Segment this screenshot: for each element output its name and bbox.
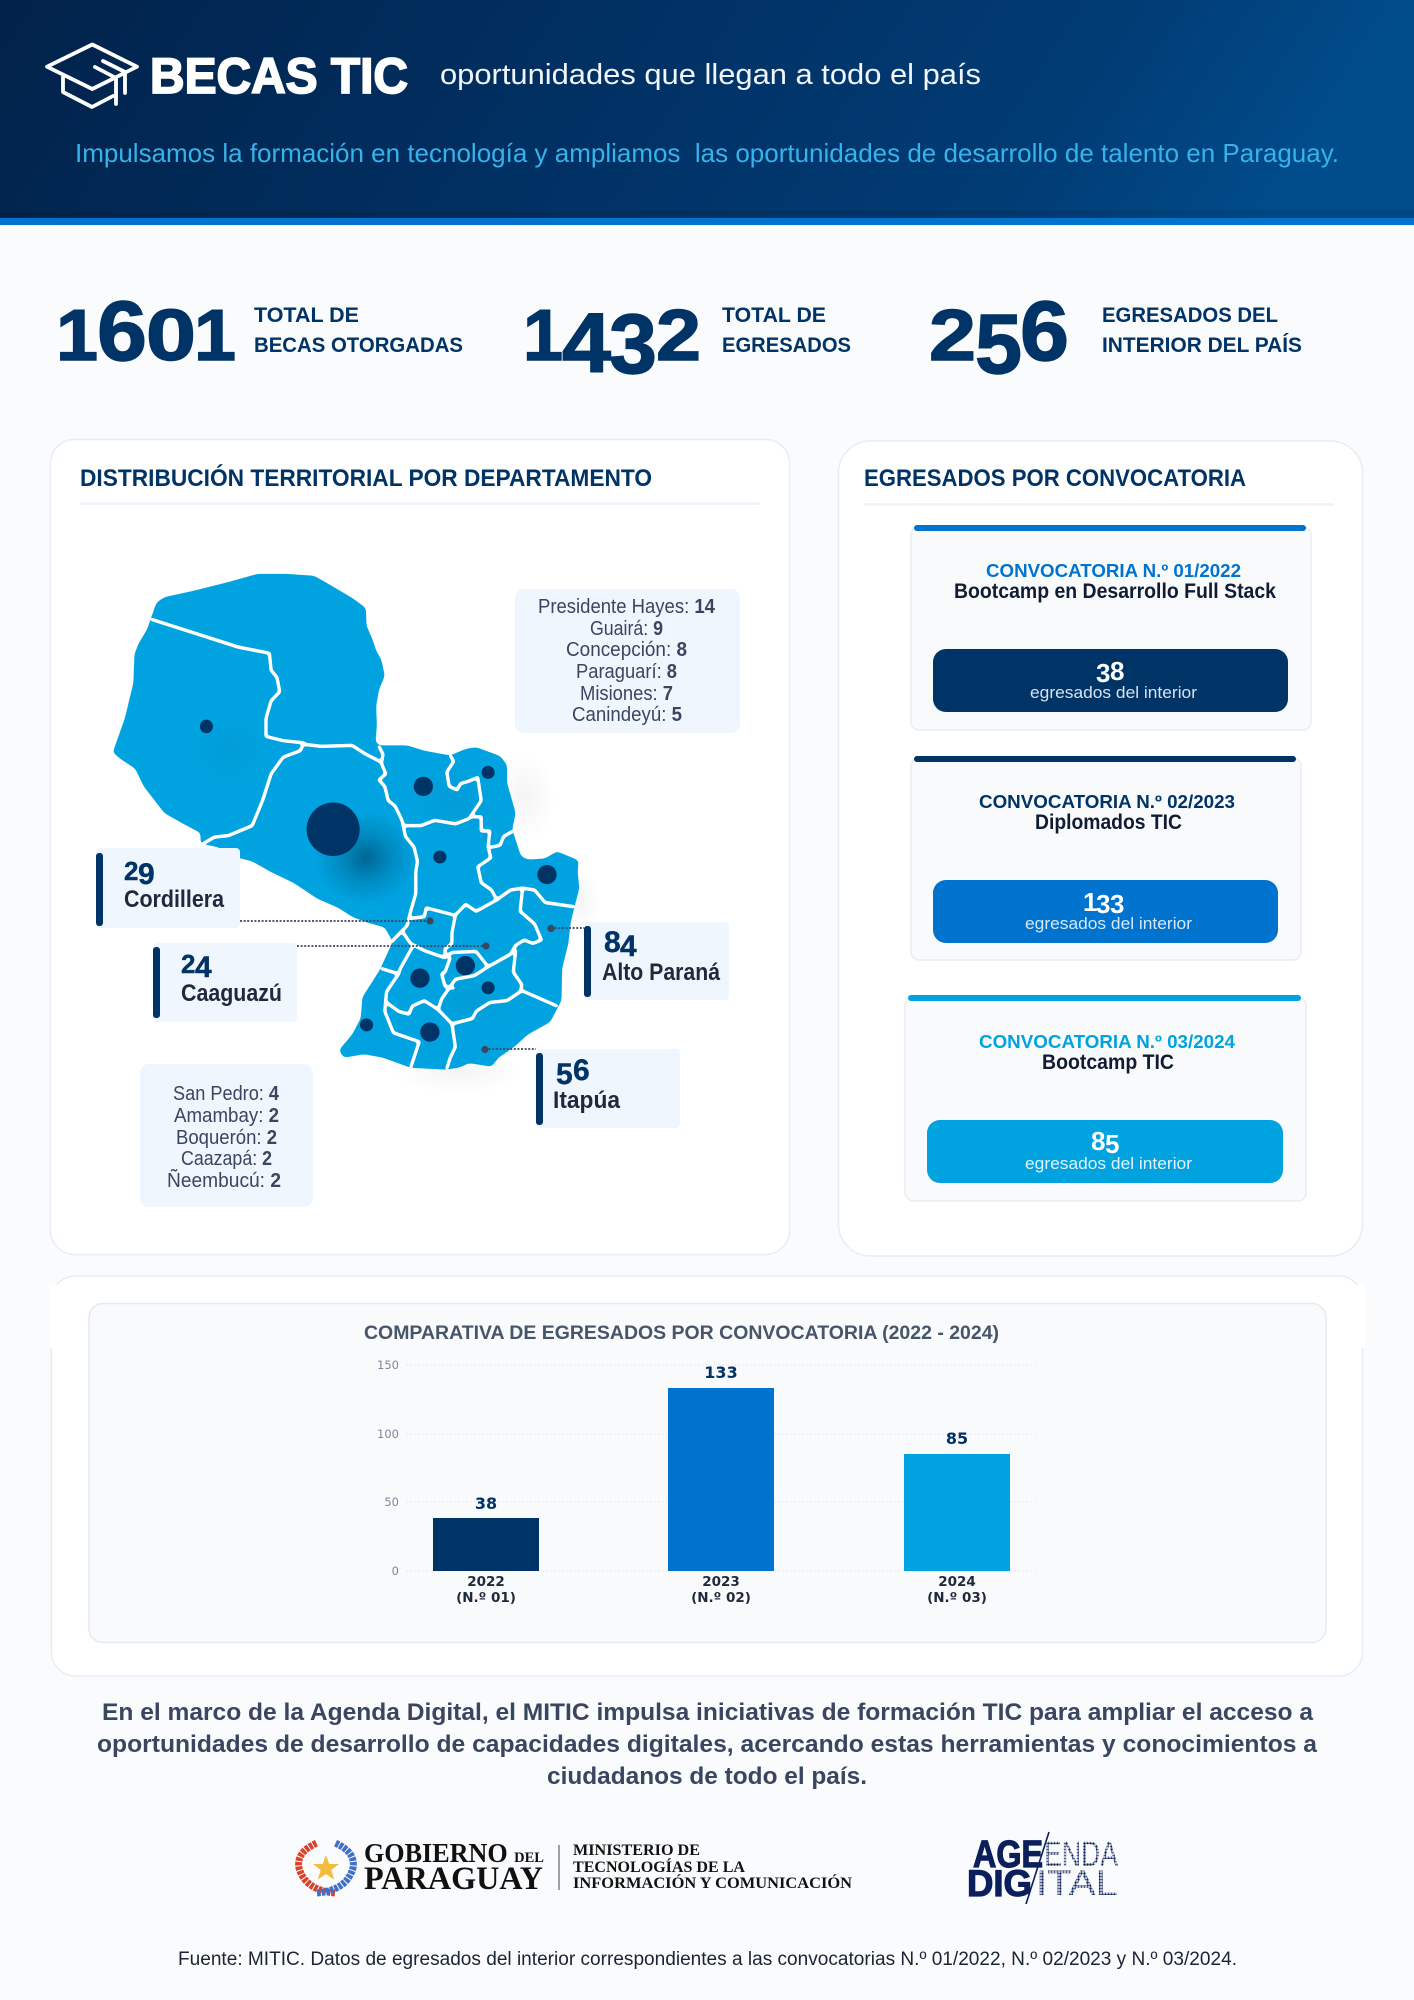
stat: 1432 egresados: 4 (562, 296, 611, 390)
logo: Gobierno del Paraguay: GOBIERNO DEL (364, 1838, 544, 1868)
list box: departamentos superiores: Presidente Hayes: 14 (538, 596, 716, 618)
department bubbles (200, 720, 557, 1042)
icon: graduation cap logo (47, 44, 137, 107)
callout: Itapúa (536, 1049, 680, 1128)
stat: 256 egresados del interior (929, 284, 1302, 391)
logo: Agenda Digital: ITAL (1036, 1864, 1118, 1903)
stat: 1432 egresados: 2 (656, 296, 701, 376)
list box: departamentos inferiores (140, 1064, 313, 1207)
list box: departamentos superiores: Paraguarí: 8 (576, 661, 677, 683)
logo: Agenda Digital: AGE (973, 1834, 1043, 1876)
closing paragraph: ciudadanos de todo el país. (547, 1763, 867, 1790)
callout: Caaguazú: 4 (195, 951, 212, 984)
value badge: egresados del interior (1030, 683, 1197, 702)
card: convocatoria 03/2024: CONVOCATORIA N.º 03/2024 (979, 1032, 1235, 1052)
leader lines (240, 917, 584, 1053)
stat: 1601 becas otorgadas: 0 (146, 296, 196, 376)
bar 2023: 133 (704, 1363, 738, 1382)
card: convocatoria 01/2022: Bootcamp en Desarrollo Full Stack (954, 580, 1276, 603)
department borders (151, 619, 574, 1069)
callout: Cordillera: 9 (138, 858, 155, 891)
list box: departamentos inferiores: Boquerón: 2 (176, 1127, 277, 1149)
callout: Cordillera: 2 (124, 856, 138, 886)
header banner (0, 0, 1414, 225)
stat: 1601 becas otorgadas: 1 (194, 296, 236, 376)
logo: Gobierno del Paraguay: MINISTERIO DE (573, 1842, 700, 1859)
callout: Caaguazú: Caaguazú (181, 980, 282, 1007)
stat label (254, 304, 463, 357)
y-axis ticks: 50 (384, 1495, 399, 1509)
bar 2024: 2024 (938, 1574, 976, 1590)
bar 2023 (668, 1363, 774, 1606)
bar 2022 (433, 1494, 539, 1606)
stat label: BECAS OTORGADAS (254, 334, 463, 357)
icon: national shield (299, 1843, 353, 1893)
y-axis ticks: 150 (377, 1358, 399, 1372)
card: convocatoria 02/2023 (911, 756, 1301, 960)
map of Paraguay (113, 574, 600, 1094)
chart title: COMPARATIVA DE EGRESADOS POR CONVOCATORIA (2022 - 2024) (364, 1323, 999, 1344)
closing paragraph (97, 1699, 1318, 1790)
bar 2024: (N.º 03) (927, 1590, 987, 1606)
logo: Gobierno del Paraguay (299, 1838, 852, 1897)
callout: Itapúa: 5 (556, 1058, 573, 1091)
value badge: 3 (1096, 658, 1110, 688)
stat: 256 egresados del interior: 5 (975, 297, 1022, 391)
subtitle: Impulsamos la formación en tecnología y ampliamos las oportunidades de desarrollo de talento en Paraguay. (75, 138, 1339, 168)
y-axis ticks: 100 (377, 1427, 399, 1441)
stat label: EGRESADOS (722, 334, 851, 357)
value badge (933, 649, 1288, 712)
y-axis ticks: 0 (392, 1564, 399, 1578)
tagline: oportunidades que llegan a todo el país (440, 59, 981, 91)
callout: Itapúa: 6 (573, 1054, 590, 1087)
closing paragraph: En el marco de la Agenda Digital, el MITIC impulsa iniciativas de formación TIC para ampliar el acceso a (102, 1699, 1314, 1726)
logo: Gobierno del Paraguay: PARAGUAY (364, 1861, 543, 1897)
list box: departamentos inferiores: Caazapá: 2 (181, 1148, 272, 1170)
panel: comparativa (50, 1276, 1365, 1676)
stat: 1432 egresados: 3 (609, 297, 657, 391)
source note: Fuente: MITIC. Datos de egresados del interior correspondientes a las convocatorias N.º 01/2022, N.º 02/2023 y N.º 03/2024. (178, 1949, 1237, 1970)
callout: Caaguazú: 2 (181, 949, 195, 979)
list box: departamentos inferiores: San Pedro: 4 (173, 1083, 280, 1105)
card: convocatoria 03/2024: Bootcamp TIC (1042, 1051, 1174, 1074)
panel: distribución territorial (50, 440, 790, 1254)
callout: Cordillera: Cordillera (124, 886, 225, 913)
stat: 256 egresados del interior: 2 (929, 296, 976, 376)
panel heading: EGRESADOS POR CONVOCATORIA (864, 465, 1246, 492)
value badge: 8 (1110, 656, 1124, 686)
value badge: 3 (1096, 889, 1110, 919)
list box: departamentos superiores: Concepción: 8 (566, 639, 687, 661)
value badge: 1 (1083, 887, 1097, 917)
stat label: TOTAL DE (722, 304, 826, 327)
value badge: egresados del interior (1025, 914, 1192, 933)
closing paragraph: oportunidades de desarrollo de capacidades digitales, acercando estas herramientas y conocimientos a (97, 1731, 1318, 1758)
logo: Agenda Digital (967, 1832, 1118, 1904)
bar 2022: 2022 (467, 1574, 505, 1590)
callout: Caaguazú (153, 943, 297, 1022)
title: BECAS TIC: BECAS TIC (150, 48, 408, 104)
y-axis ticks (377, 1358, 399, 1578)
stat: 256 egresados del interior: 6 (1020, 284, 1069, 378)
callout: Alto Paraná (584, 922, 729, 1000)
list box: departamentos superiores: Guairá: 9 (590, 618, 663, 640)
list box: departamentos inferiores: Ñeembucú: 2 (167, 1168, 281, 1192)
bar 2022: 38 (475, 1494, 497, 1513)
stat label (722, 304, 851, 357)
stat: 1432 egresados (523, 296, 851, 391)
value badge: 3 (1110, 889, 1124, 919)
logo: Gobierno del Paraguay: TECNOLOGÍAS DE LA (573, 1859, 746, 1876)
card: convocatoria 02/2023: CONVOCATORIA N.º 02/2023 (979, 792, 1235, 812)
bar 2022: (N.º 01) (456, 1590, 516, 1606)
panel heading: DISTRIBUCIÓN TERRITORIAL POR DEPARTAMENTO (80, 464, 652, 492)
stat: 1601 becas otorgadas: 1 (56, 296, 98, 376)
card: convocatoria 01/2022 (911, 525, 1311, 730)
value badge (927, 1120, 1283, 1183)
bar 2023: (N.º 02) (691, 1590, 751, 1606)
stat label: EGRESADOS DEL (1102, 304, 1278, 327)
stat: 1432 egresados: 1 (523, 296, 563, 376)
logo: Gobierno del Paraguay: INFORMACIÓN Y COMUNICACIÓN (573, 1875, 852, 1892)
card: convocatoria 03/2024 (905, 995, 1306, 1201)
list box: departamentos superiores: Canindeyú: 5 (572, 704, 682, 726)
bar chart (377, 1358, 1037, 1606)
logo: Agenda Digital: ENDA (1044, 1835, 1118, 1874)
list box: departamentos superiores (515, 589, 740, 733)
value badge: 5 (1105, 1129, 1119, 1159)
list box: departamentos superiores: Misiones: 7 (580, 683, 673, 705)
callout: Alto Paraná: 4 (620, 930, 637, 963)
value badge: egresados del interior (1025, 1154, 1192, 1173)
card: convocatoria 02/2023: Diplomados TIC (1035, 811, 1182, 834)
callout: Alto Paraná: Alto Paraná (602, 959, 721, 986)
bar 2024 (904, 1429, 1010, 1606)
value badge: 8 (1091, 1126, 1105, 1156)
card: convocatoria 01/2022: CONVOCATORIA N.º 01/2022 (986, 561, 1241, 581)
stat label: TOTAL DE (254, 304, 359, 327)
list box: departamentos inferiores: Amambay: 2 (174, 1105, 279, 1127)
stat: 1601 becas otorgadas (56, 284, 463, 378)
bar 2023: 2023 (702, 1574, 740, 1590)
callout: Cordillera (96, 848, 240, 928)
callout: Itapúa: Itapúa (553, 1087, 621, 1114)
panel: egresados por convocatoria (838, 441, 1362, 1256)
value badge (933, 880, 1278, 943)
stat: 1601 becas otorgadas: 6 (97, 284, 147, 378)
callout: Alto Paraná: 8 (604, 926, 621, 959)
logo: Agenda Digital: DIG (967, 1863, 1032, 1904)
stat label: INTERIOR DEL PAÍS (1102, 334, 1302, 357)
stat label (1102, 304, 1302, 357)
bar 2024: 85 (946, 1429, 968, 1448)
